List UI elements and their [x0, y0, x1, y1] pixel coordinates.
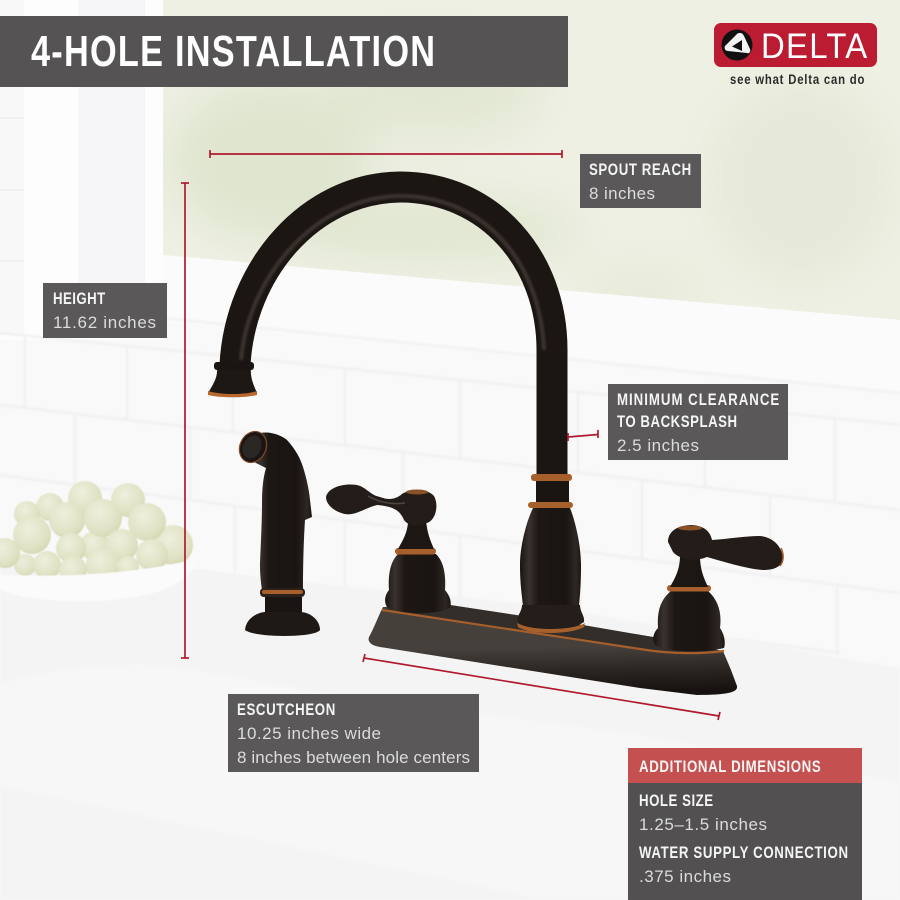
callout: escutcheon: 10.25 inches wide — [237, 724, 381, 743]
window frame — [0, 0, 163, 340]
spout — [208, 187, 552, 476]
Delta logo: DELTA — [761, 27, 868, 66]
callout: minimum clearance — [608, 384, 788, 460]
right handle — [653, 525, 783, 652]
spout aerator — [208, 368, 257, 397]
subway tiles — [0, 318, 900, 655]
dimension line: clearance — [568, 430, 598, 441]
faucet — [208, 187, 783, 695]
callout: minimum clearance: MINIMUM CLEARANCE — [617, 391, 779, 409]
plate — [0, 559, 197, 601]
panel: additional dimensions — [628, 748, 862, 900]
title banner — [0, 16, 568, 87]
callout: height: 11.62 inches — [53, 313, 156, 332]
panel: additional dimensions: ADDITIONAL DIMENSIONS — [639, 758, 821, 776]
callout: spout reach — [580, 154, 701, 208]
escutcheon — [369, 605, 737, 695]
callout: escutcheon — [228, 694, 479, 772]
callout: height — [43, 283, 167, 338]
grapes on a plate — [0, 481, 197, 601]
dimension line: escutcheon — [363, 654, 720, 720]
panel: additional dimensions: WATER SUPPLY CONNECTION — [639, 844, 848, 862]
Delta logo: see what Delta can do — [730, 72, 865, 87]
dimension line: spout reach — [210, 150, 562, 158]
callout: minimum clearance: TO BACKSPLASH — [617, 413, 737, 431]
Delta logo — [714, 23, 877, 87]
icon: delta mark — [722, 30, 752, 60]
callout: height: HEIGHT — [53, 290, 106, 308]
dimension line: height — [181, 183, 189, 658]
panel: additional dimensions: HOLE SIZE — [639, 792, 713, 810]
title banner: 4-HOLE INSTALLATION — [31, 27, 435, 76]
window view — [163, 0, 900, 320]
left handle — [326, 485, 451, 613]
window ledge — [163, 255, 900, 393]
main column — [517, 474, 585, 633]
side sprayer — [234, 427, 320, 636]
callout: escutcheon: 8 inches between hole centers — [237, 748, 470, 767]
callout: minimum clearance: 2.5 inches — [617, 436, 699, 455]
countertop — [0, 560, 900, 900]
callout: escutcheon: ESCUTCHEON — [237, 701, 335, 719]
panel: additional dimensions: .375 inches — [639, 867, 731, 886]
callout: spout reach: 8 inches — [589, 184, 655, 203]
panel: additional dimensions: 1.25–1.5 inches — [639, 815, 767, 834]
callout: spout reach: SPOUT REACH — [589, 161, 691, 179]
sink basin — [0, 665, 900, 900]
